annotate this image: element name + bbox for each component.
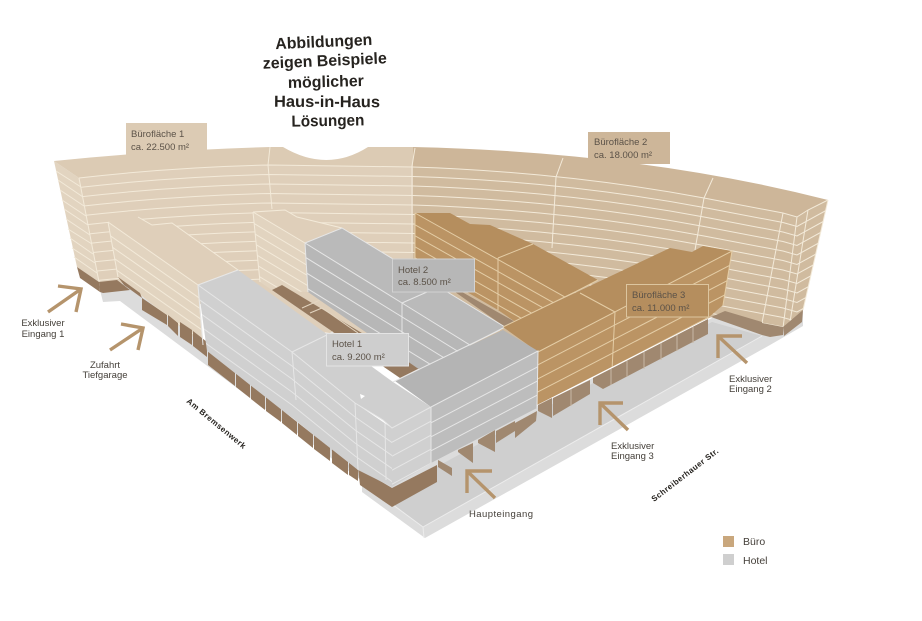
roof left [54, 147, 413, 178]
label: Hotel 2 [392, 259, 474, 292]
Hotel 1 block [190, 270, 545, 500]
plinth: Hotel front teeth [438, 411, 537, 476]
title: Abbildungen [275, 32, 373, 53]
Büro block inner [414, 212, 598, 321]
label: Hotel 1 [326, 334, 408, 366]
arrow: Haupteingang [467, 471, 495, 498]
title: Lösungen [291, 112, 365, 131]
ground plate [100, 280, 803, 538]
label: Hotel 2: ca. 8.500 m² [398, 277, 451, 288]
back wall: Bürofläche 1 and 2 [54, 147, 828, 347]
title [262, 32, 387, 131]
legend: Hotel [743, 555, 768, 567]
label: Bürofläche 2: ca. 18.000 m² [594, 150, 652, 161]
label: Hotel 2: Hotel 2 [398, 265, 428, 276]
label: Bürofläche 3: ca. 11.000 m² [632, 303, 689, 314]
plinth: corner [358, 465, 437, 507]
caption: Exklusiver Eingang 3: Exklusiver [611, 441, 654, 452]
label: Bürofläche 3: Bürofläche 3 [632, 290, 685, 301]
caption: Exklusiver Eingang 3: Eingang 3 [611, 451, 654, 462]
caption: Exklusiver Eingang 1: Eingang 1 [22, 329, 64, 340]
legend: Büro [743, 536, 765, 548]
label: Bürofläche 2: Bürofläche 2 [594, 137, 647, 148]
arrow: Exklusiver Eingang 3 [600, 403, 628, 430]
street: Am Bremsenwerk: Am Bremsenwerk [185, 397, 248, 451]
caption: Exklusiver Eingang 2: Eingang 2 [729, 384, 772, 395]
title: Haus-in-Haus [274, 94, 380, 111]
legend [723, 536, 768, 567]
label: Bürofläche 1 [126, 123, 207, 156]
plinth: right end [711, 310, 803, 337]
arrow: Exklusiver Eingang 1 [48, 286, 81, 312]
street: Schreiberhauer Str.: Schreiberhauer Str. [650, 447, 720, 504]
caption: Exklusiver Eingang 1: Exklusiver [21, 318, 65, 329]
label: Hotel 1: Hotel 1 [332, 339, 362, 350]
label: Hotel 1: ca. 9.200 m² [332, 352, 385, 363]
left wing: Bürofläche 1 [105, 217, 238, 345]
plinth: Büro front [538, 319, 708, 418]
caption: Exklusiver Eingang 2: Exklusiver [729, 374, 772, 385]
center wing: Bürofläche 1 [252, 210, 342, 292]
Hotel 2 block [304, 228, 504, 369]
title: zeigen Beispiele [262, 50, 387, 73]
left end face [54, 161, 99, 282]
caption: Zufahrt Tiefgarage: Tiefgarage [82, 370, 128, 381]
arrow: Exklusiver Eingang 2 [718, 336, 747, 363]
title: möglicher [288, 73, 364, 92]
plinth: back left [77, 267, 130, 293]
caption: Haupteingang: Haupteingang [469, 509, 533, 520]
label: Bürofläche 1: ca. 22.500 m² [131, 142, 189, 153]
caption: Zufahrt Tiefgarage: Zufahrt [90, 360, 120, 371]
Büro block front [502, 246, 732, 405]
courtyard ground [272, 285, 517, 378]
plinth: Hotel left side [118, 277, 358, 481]
roof right [413, 147, 828, 217]
label: Bürofläche 1: Bürofläche 1 [131, 129, 184, 140]
arrow: Zufahrt Tiefgarage [110, 324, 143, 350]
label: Bürofläche 3 [626, 284, 708, 317]
label: Bürofläche 2 [588, 132, 670, 164]
